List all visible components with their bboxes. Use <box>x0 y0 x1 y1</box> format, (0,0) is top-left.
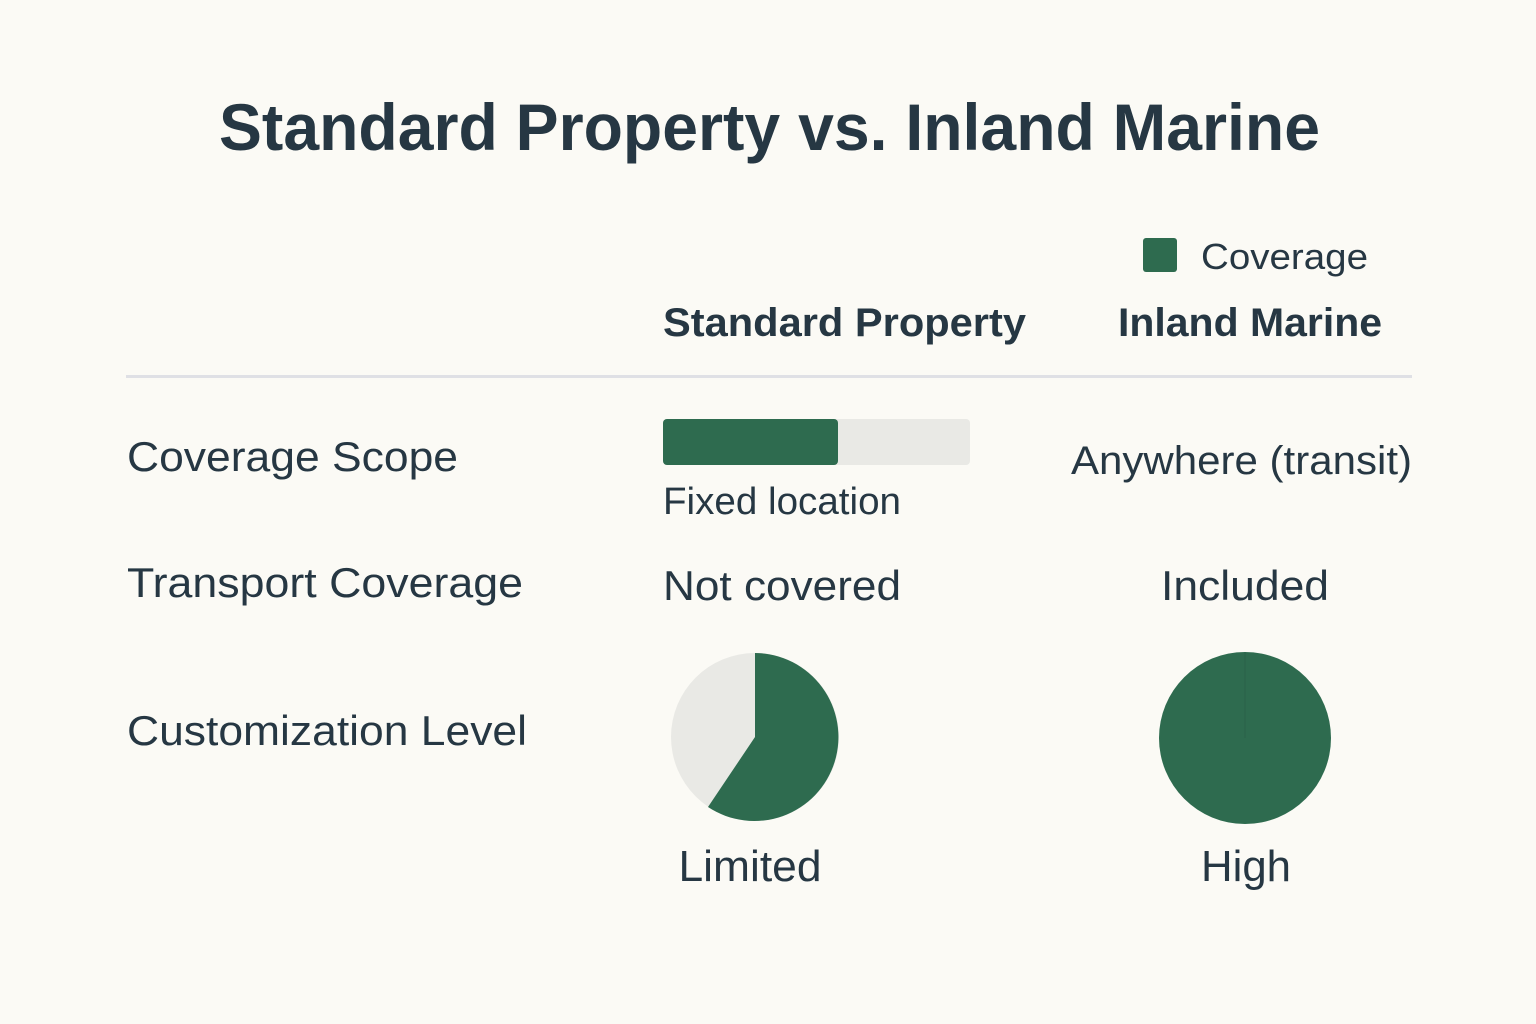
legend: coverage: Coverage <box>1201 236 1368 277</box>
row label: customization level: Customization Level <box>127 707 527 754</box>
text: fixed location: Fixed location <box>663 481 901 523</box>
text: not covered: Not covered <box>663 562 901 609</box>
legend: coverage <box>1143 236 1368 277</box>
title: Standard Property vs. Inland Marine <box>219 90 1320 164</box>
text: high: High <box>1201 842 1291 891</box>
text: included: Included <box>1161 562 1329 609</box>
text: anywhere (transit): Anywhere (transit) <box>1071 439 1412 483</box>
column header: inland marine: Inland Marine <box>1118 301 1382 345</box>
text: limited: Limited <box>678 842 822 891</box>
row label: coverage scope: Coverage Scope <box>127 433 458 480</box>
pie chart: high <box>1159 652 1331 824</box>
row label: transport coverage: Transport Coverage <box>127 559 523 606</box>
column header: standard property: Standard Property <box>663 301 1027 345</box>
bar chart: fixed location <box>663 419 970 465</box>
pie chart: limited <box>671 653 839 821</box>
